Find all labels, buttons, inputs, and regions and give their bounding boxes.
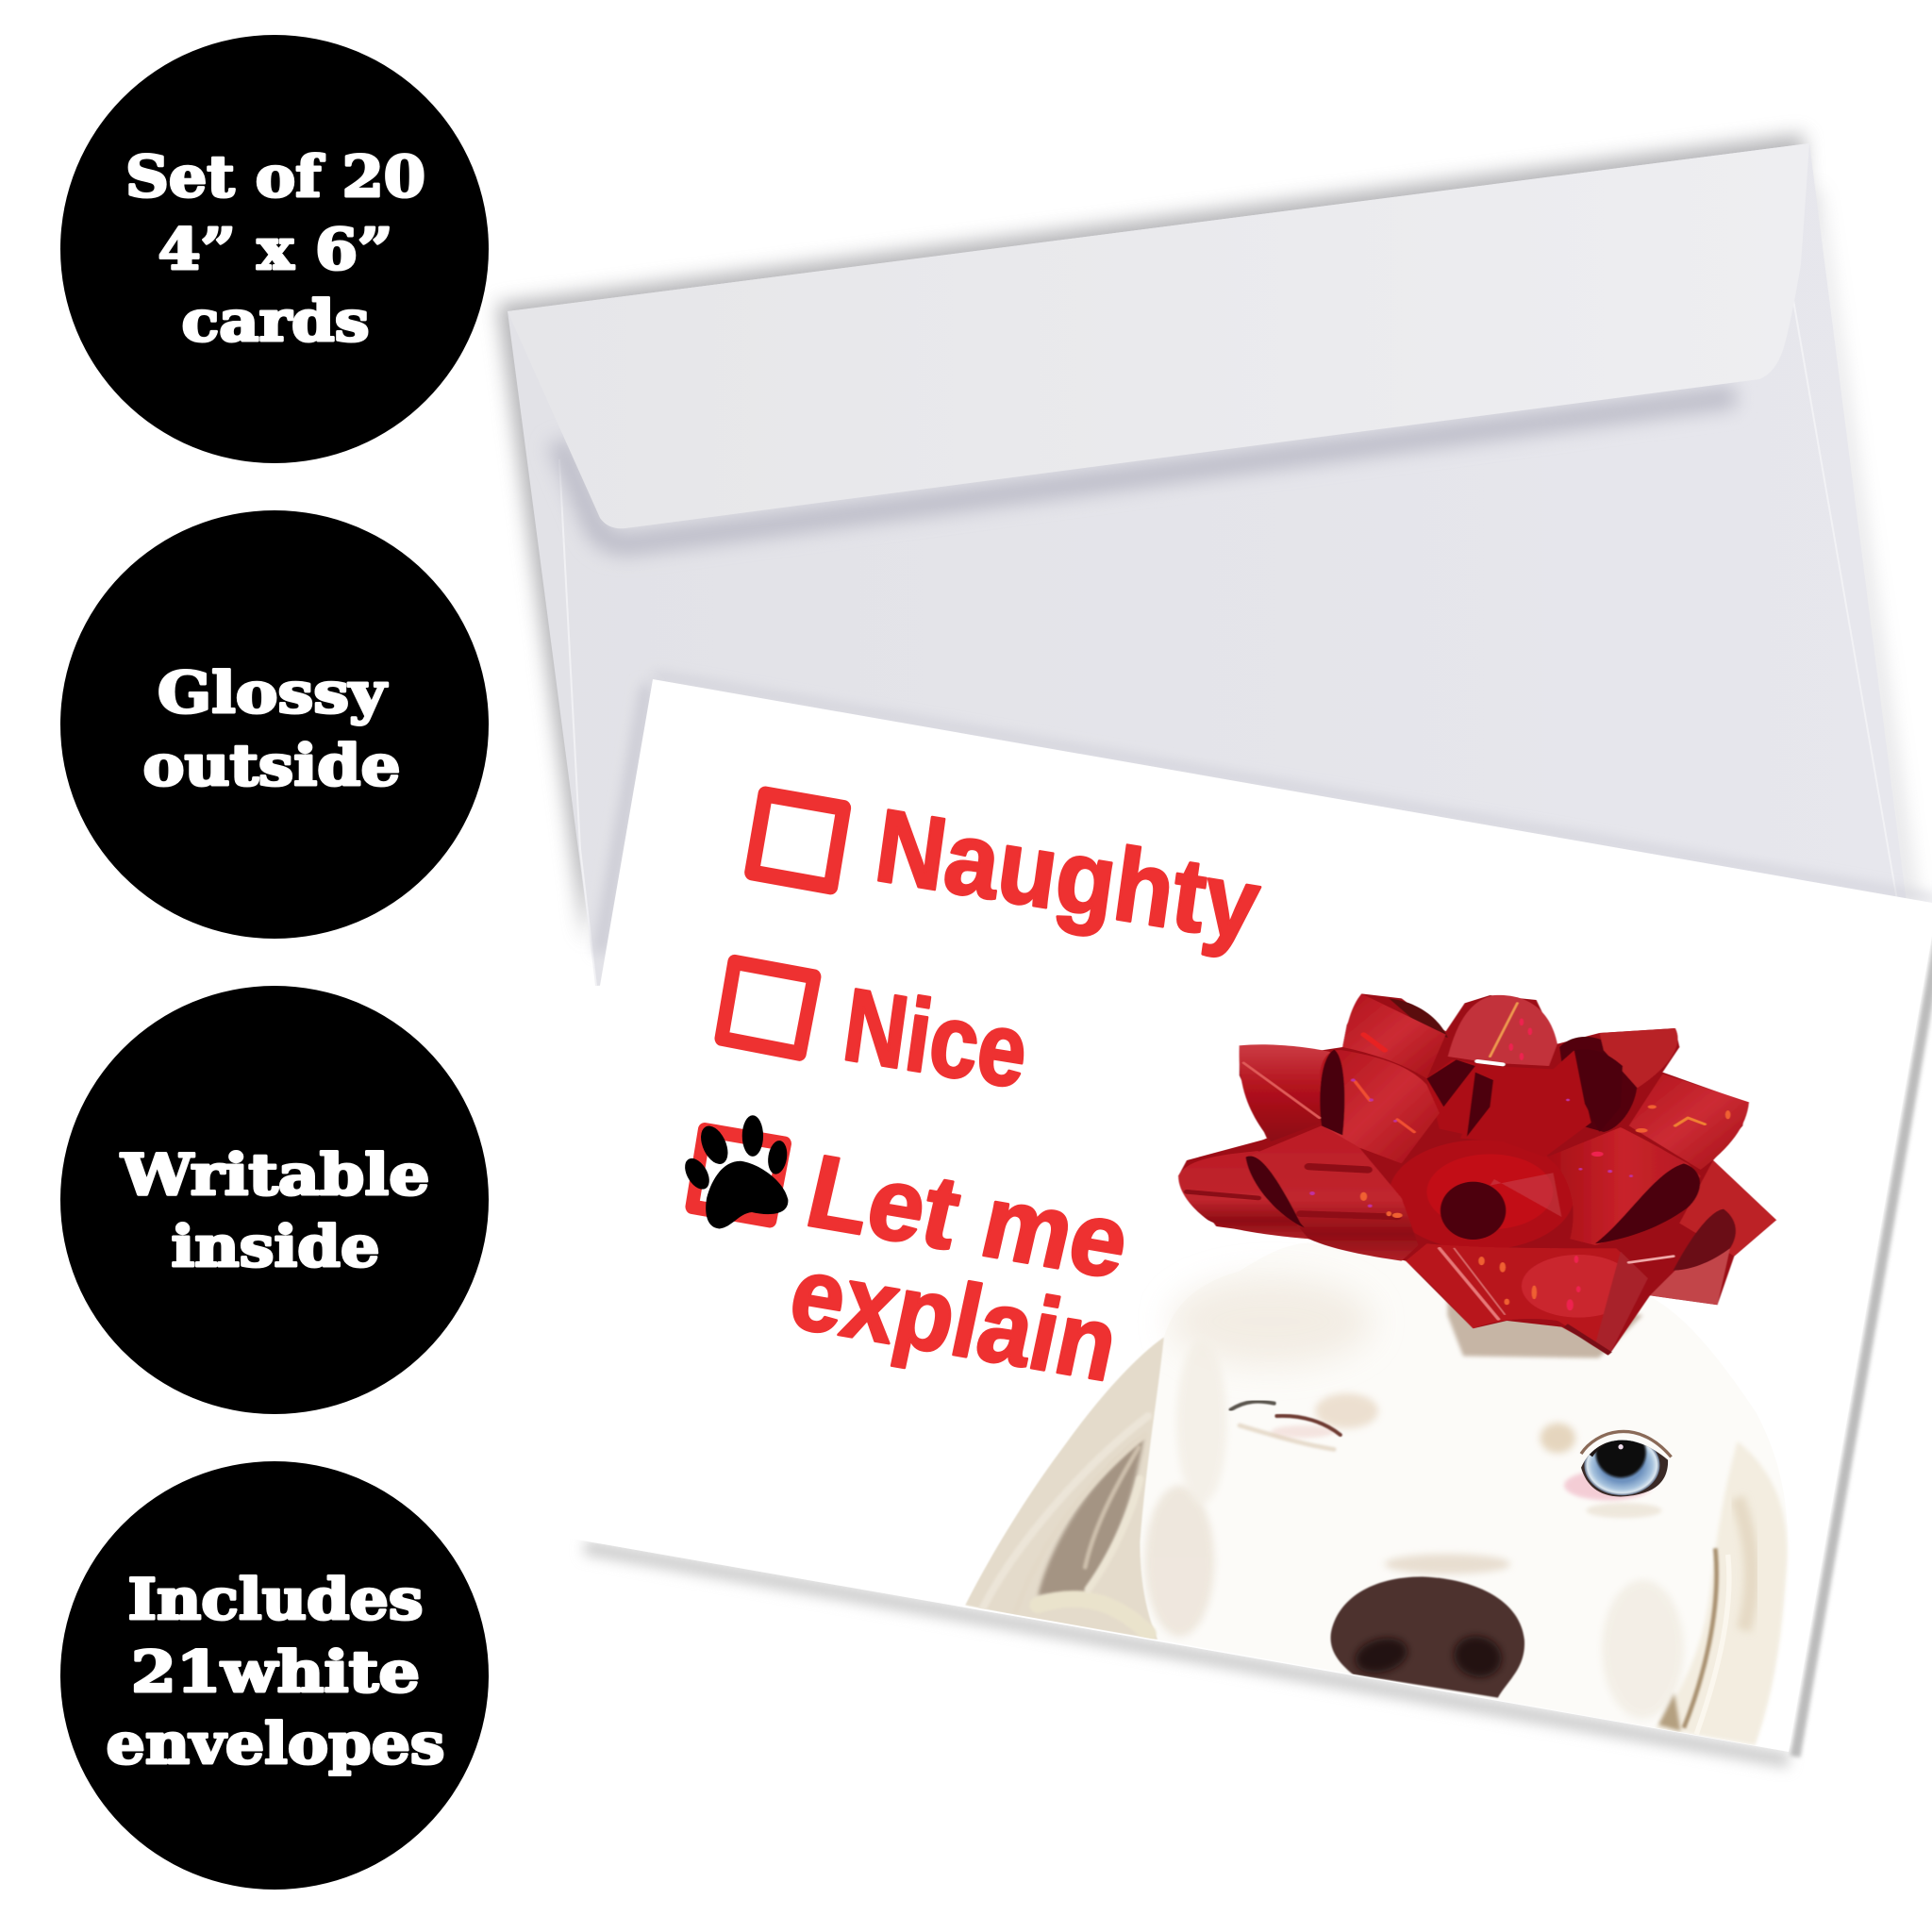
petal: centre left dark: [1426, 1059, 1494, 1135]
petal: far left: [1178, 1151, 1308, 1239]
red bow: [1178, 993, 1776, 1354]
paw print: [680, 1115, 790, 1228]
left ear: [965, 1338, 1164, 1640]
petal: lower left: [1246, 1125, 1419, 1261]
right ear: [1656, 1441, 1787, 1745]
badge: set of 20 cards: Set of 20: [125, 144, 425, 210]
label: let me: Let me: [797, 1134, 1140, 1301]
bow highlights: [1187, 1003, 1705, 1319]
loop: small right: [1650, 1248, 1730, 1305]
petal: top right: [1600, 1028, 1678, 1088]
badge: glossy outside: Glossy: [158, 660, 388, 726]
petal: upper left: [1240, 1044, 1330, 1141]
checkbox: let me explain: [692, 1130, 785, 1221]
dog: [965, 1242, 1788, 1762]
label: naughty: Naughty: [869, 788, 1266, 963]
petal: middle left: [1320, 1050, 1440, 1163]
petal: top left: [1342, 993, 1446, 1078]
badge: includes 21 white envelopes: envelopes: [106, 1711, 445, 1777]
badge: set of 20 cards: [60, 35, 489, 463]
badge: writable inside: [60, 986, 489, 1414]
badge: set of 20 cards: cards: [181, 289, 370, 355]
bow centre: [1389, 1140, 1574, 1250]
card shadows: [585, 675, 1932, 1760]
petal: top centre: [1448, 995, 1557, 1066]
bow sparkles: [1309, 1018, 1730, 1310]
nose: [1331, 1576, 1524, 1698]
badge: includes 21 white envelopes: 21white: [131, 1640, 420, 1706]
greeting card: [507, 675, 1932, 1762]
petal: centre right: [1460, 1050, 1591, 1158]
label: nice: Nice: [837, 967, 1034, 1110]
badge: writable inside: Writable: [120, 1142, 430, 1208]
checklist: [680, 788, 1266, 1403]
badge: set of 20 cards: 4” x 6”: [158, 217, 392, 283]
badge: writable inside: inside: [172, 1214, 379, 1280]
petal: middle right: [1547, 1127, 1701, 1245]
winking eye: [1231, 1402, 1341, 1449]
face cream patches: [1145, 1277, 1684, 1719]
checkbox: naughty: [752, 794, 843, 887]
badge: glossy outside: outside: [143, 733, 400, 799]
petal: far right: [1679, 1160, 1776, 1257]
badge: includes 21 white envelopes: [60, 1461, 489, 1890]
centre button: [1426, 1154, 1553, 1229]
checkbox: nice: [722, 962, 814, 1054]
bow shadow on head: [1445, 1301, 1643, 1360]
dog head: [965, 1242, 1788, 1762]
envelope flap: [508, 143, 1809, 528]
badge: glossy outside: [60, 510, 489, 939]
back loops: [1389, 998, 1448, 1038]
petal: right upper: [1629, 1074, 1749, 1170]
bow base: [1178, 993, 1776, 1354]
envelope: [497, 134, 1919, 986]
badge: includes 21 white envelopes: Includes: [128, 1567, 423, 1633]
envelope flap shadow: [558, 396, 1736, 544]
label: explain: explain: [781, 1236, 1127, 1403]
petal: bottom band: [1406, 1243, 1646, 1354]
open blue eye: [1562, 1430, 1673, 1502]
